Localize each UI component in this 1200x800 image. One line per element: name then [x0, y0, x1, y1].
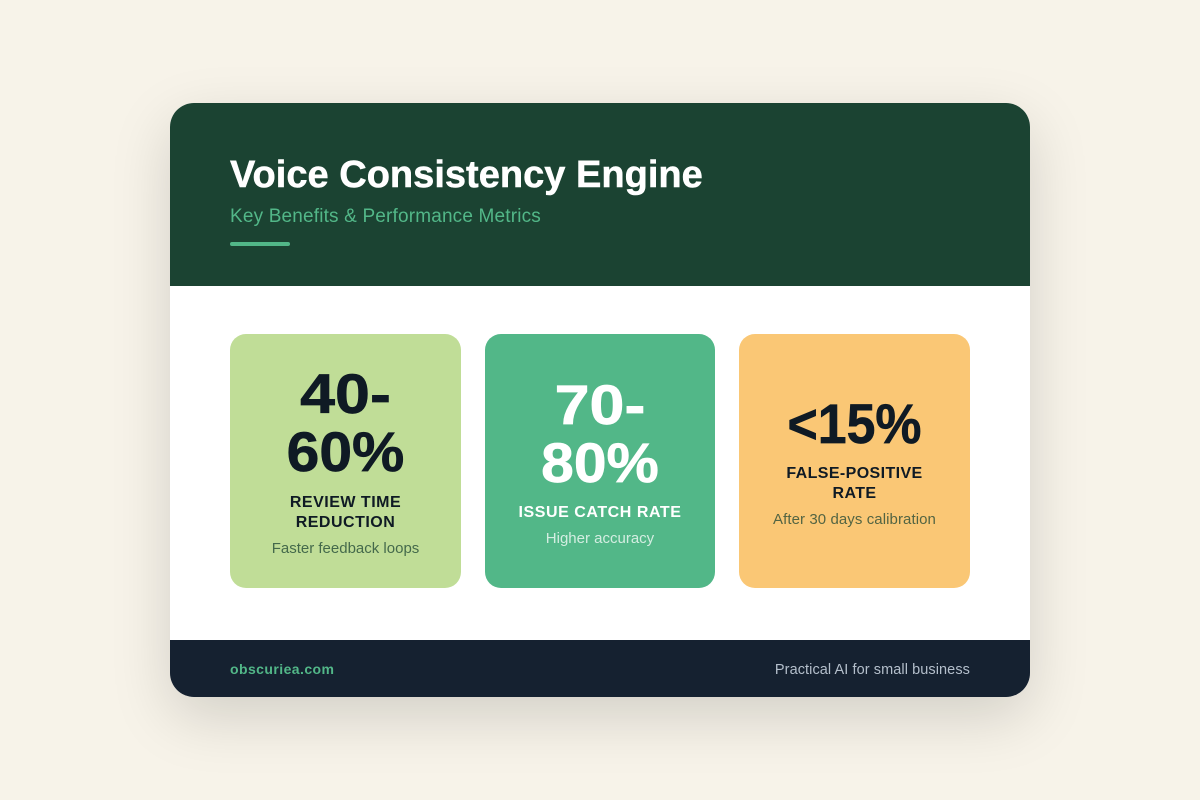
footer tagline: Practical AI for small business: [775, 662, 970, 678]
metric value: 80%: [541, 431, 659, 494]
metric note: Faster feedback loops: [272, 540, 419, 557]
accent bar: [230, 242, 290, 246]
metric note: Higher accuracy: [546, 530, 654, 547]
metric value: 60%: [287, 420, 404, 483]
metric value: 70-: [555, 373, 645, 436]
metric label: REDUCTION: [296, 514, 395, 531]
footer brand: obscuriea.com: [230, 661, 334, 677]
subtitle: Key Benefits & Performance Metrics: [230, 206, 541, 227]
footer panel: [170, 640, 1030, 697]
card: [170, 103, 1030, 697]
metric card: review time reduction: [230, 334, 461, 588]
metric note: After 30 days calibration: [773, 511, 936, 528]
metric label: REVIEW TIME: [290, 494, 401, 511]
metric label: RATE: [833, 485, 876, 502]
metric label: ISSUE CATCH RATE: [519, 504, 681, 521]
header panel: [170, 103, 1030, 286]
metric label: [290, 494, 401, 531]
metric value: <15%: [788, 392, 921, 455]
title: Voice Consistency Engine: [230, 154, 703, 196]
metric value: 40-: [300, 362, 391, 425]
metric card: issue catch rate: [485, 334, 715, 588]
metric card: false-positive rate: [739, 334, 970, 588]
metric label: FALSE-POSITIVE: [786, 465, 923, 482]
metric value: [541, 373, 659, 494]
metric value: [287, 362, 404, 483]
metric label: [786, 465, 923, 502]
